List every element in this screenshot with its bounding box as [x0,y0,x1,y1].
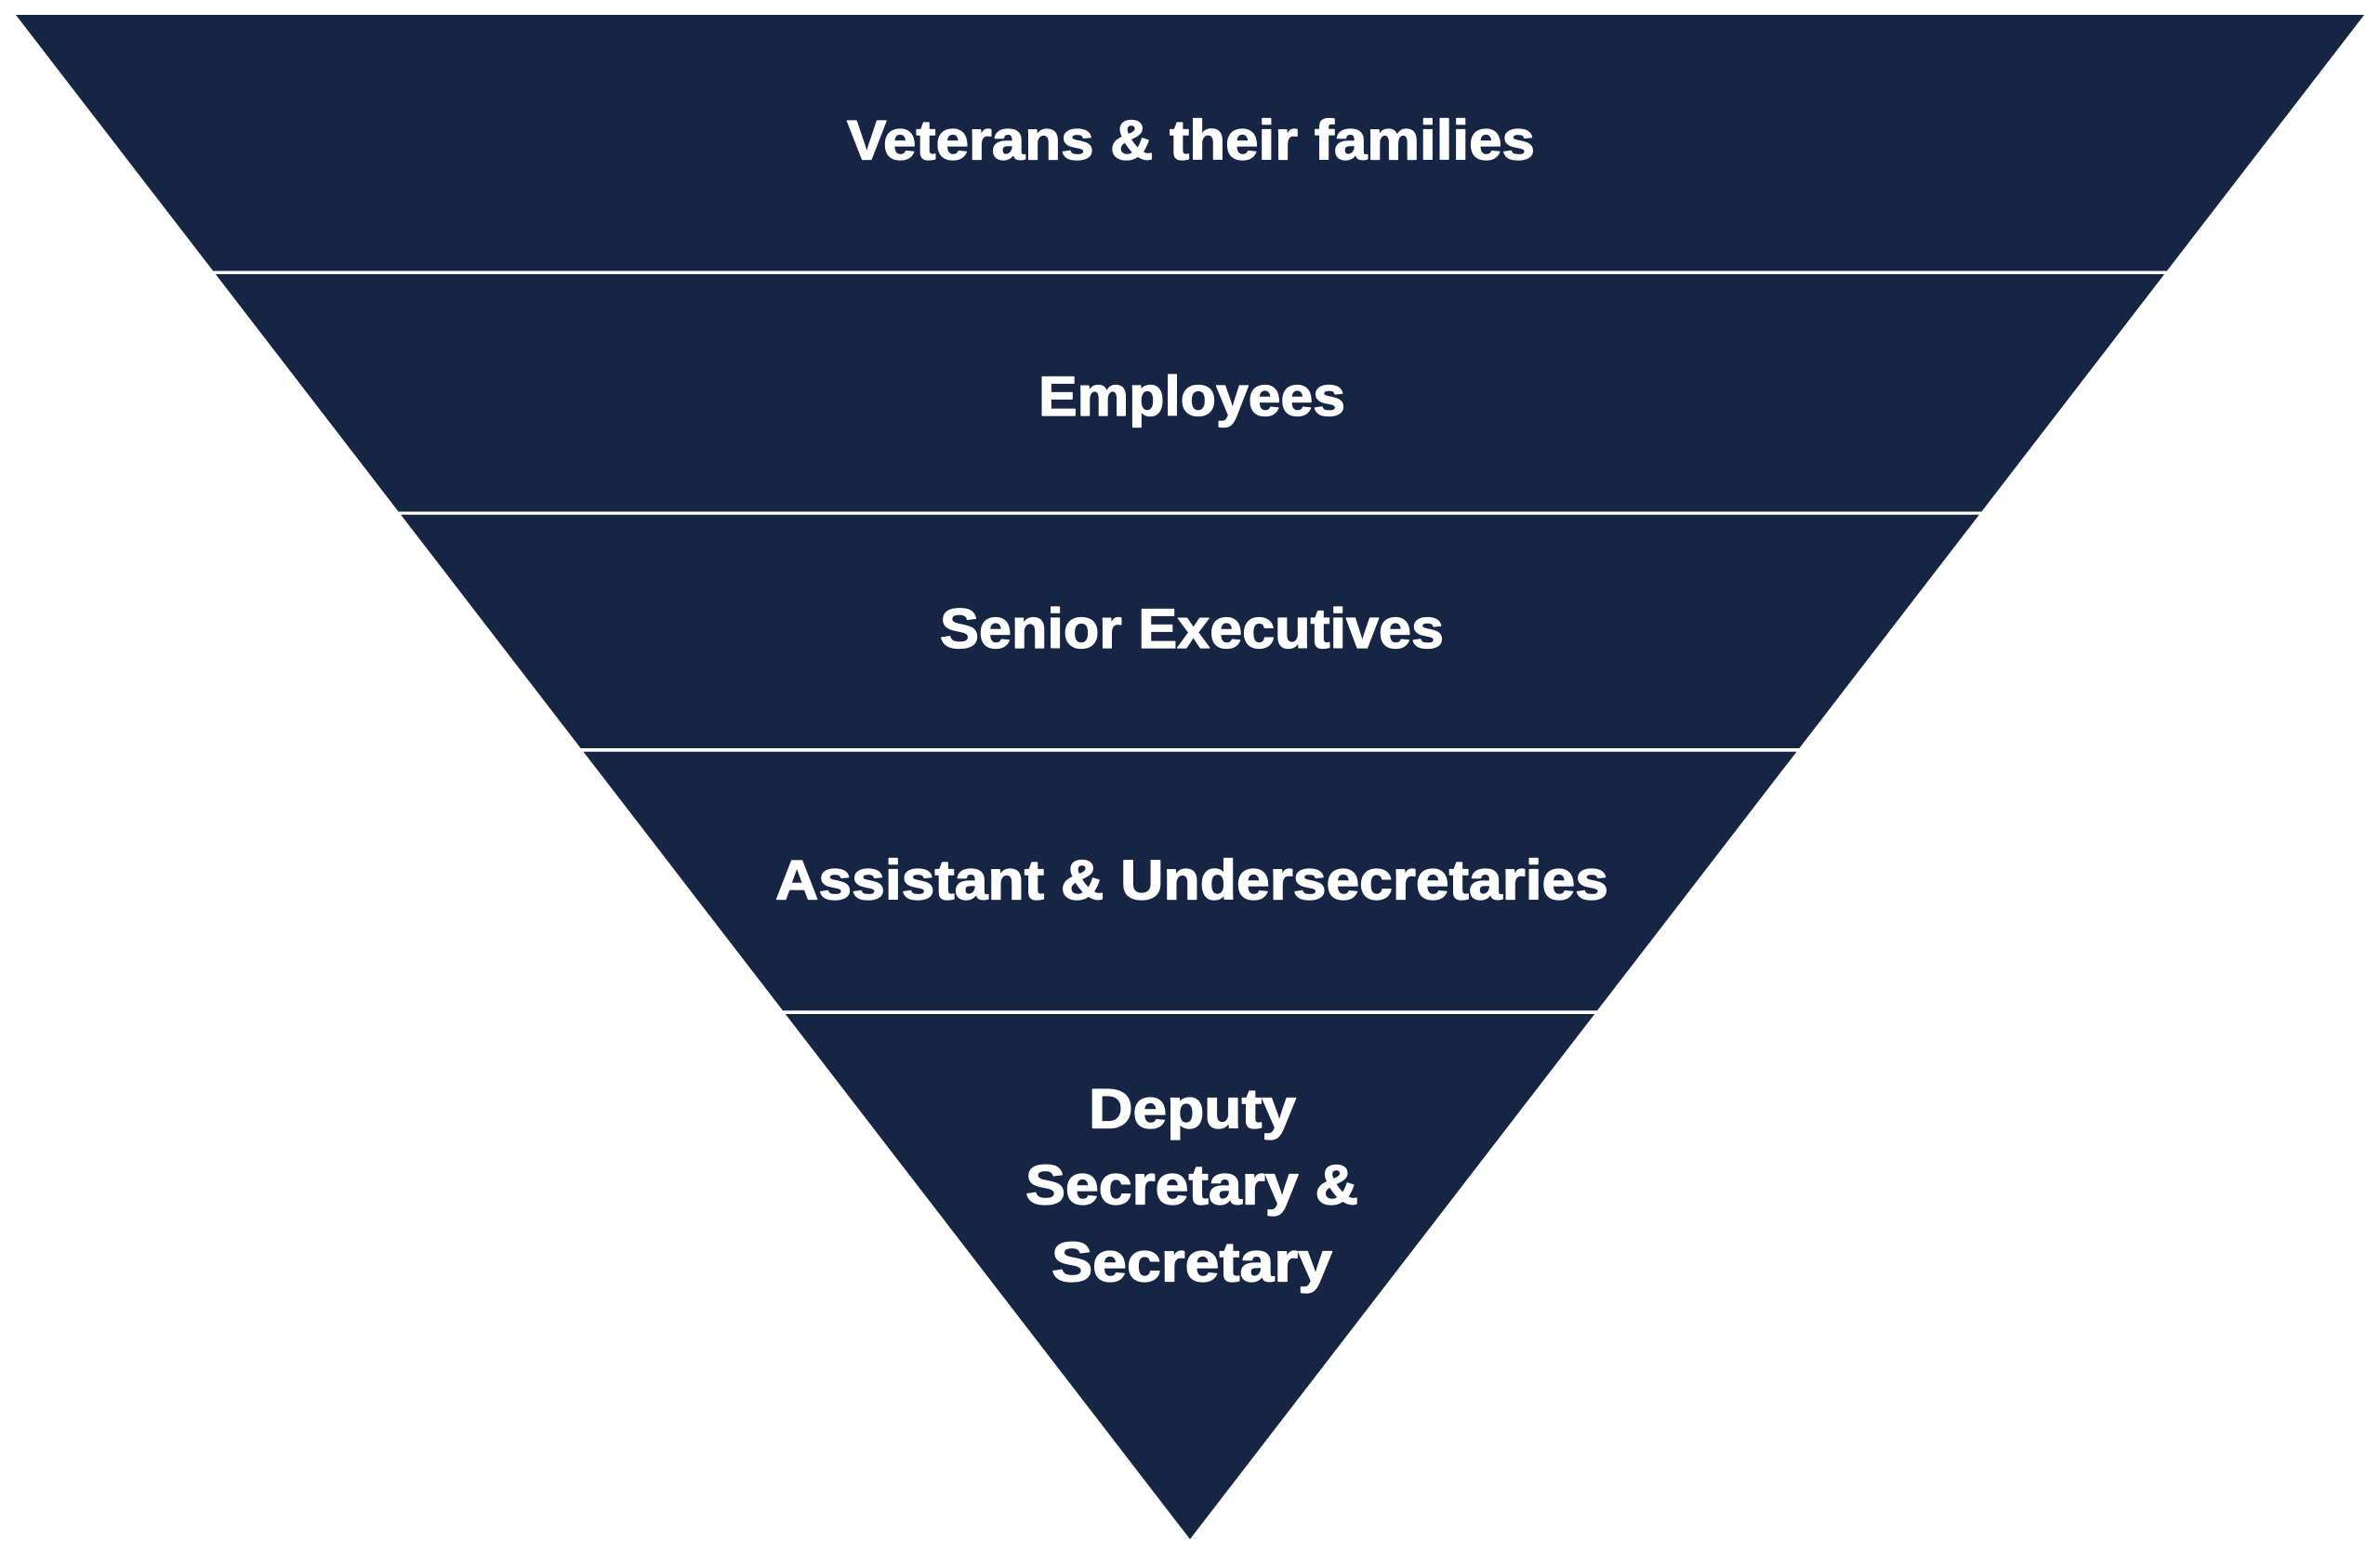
pyramid tier 1: Veterans and their families [16,15,2364,271]
label: Deputy Secretary and Secretary: Deputy [1089,1078,1297,1140]
label: Deputy Secretary and Secretary: Secretary & [1025,1154,1358,1216]
label: Deputy Secretary and Secretary [1025,1078,1358,1294]
label: Deputy Secretary and Secretary: Secretary [1051,1231,1333,1294]
pyramid tier 2: Employees [216,274,2164,511]
pyramid tier 4: Assistant and Undersecretaries [584,752,1796,1010]
pyramid tier 5: Deputy Secretary and Secretary [786,1014,1594,1539]
label: Employees: Employees [1038,365,1345,428]
label: Veterans and their families: Veterans & their families [847,110,1535,171]
label: Senior Executives: Senior Executives [940,598,1444,660]
pyramid tier 3: Senior Executives [401,515,1979,748]
label: Assistant and Undersecretaries: Assistant & Undersecretaries [775,850,1608,911]
